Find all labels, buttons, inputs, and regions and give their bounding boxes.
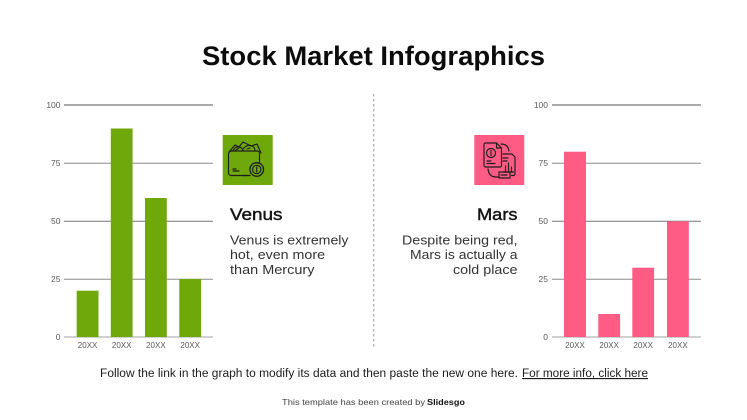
y axis labels: Mars chart: 0 [543, 332, 548, 342]
y axis labels: Venus chart: 100 [46, 100, 61, 110]
y axis labels: Mars chart: 75 [539, 158, 548, 168]
icon: wallet with cash and coin [223, 135, 273, 185]
description: Venus: than Mercury [230, 262, 315, 277]
y axis labels: Venus chart [46, 100, 61, 342]
description: Mars: Mars is actually a [410, 247, 518, 262]
text block: Venus [230, 205, 349, 277]
text block: Mars [402, 205, 518, 277]
bars: Mars values [564, 152, 689, 337]
bars: Venus values [77, 128, 201, 337]
description: Venus: Venus is extremely [230, 232, 349, 247]
description: Venus [230, 232, 349, 277]
heading: Venus: Venus [230, 205, 282, 224]
x axis labels: Venus chart: 20XX [78, 341, 98, 350]
title: Stock Market Infographics [202, 41, 545, 71]
icon: financial documents [474, 135, 524, 185]
y axis labels: Mars chart [534, 100, 548, 342]
credit line: Slidesgo [427, 397, 465, 407]
x axis labels: Venus chart [78, 341, 201, 350]
x axis labels: Venus chart: 20XX [112, 341, 132, 350]
x axis labels: Mars chart: 20XX [668, 341, 688, 350]
x axis labels: Venus chart: 20XX [180, 341, 201, 350]
heading: Mars: Mars [477, 205, 518, 224]
description: Mars: Despite being red, [402, 232, 518, 247]
description: Mars: cold place [453, 262, 518, 277]
y axis labels: Mars chart: 100 [534, 100, 548, 110]
description: Venus: hot, even more [230, 247, 325, 262]
x axis labels: Mars chart: 20XX [633, 341, 654, 350]
y axis labels: Venus chart: 50 [51, 216, 61, 226]
y axis labels: Mars chart: 25 [539, 274, 548, 284]
y axis labels: Mars chart: 50 [539, 216, 548, 226]
credit line: This template has been created by [282, 397, 426, 407]
x axis labels: Mars chart [565, 341, 688, 350]
caption with link: For more info, click here [522, 368, 648, 380]
caption with link: Follow the link in the graph to modify its data and then paste the new one here. [100, 368, 518, 380]
description: Mars [402, 232, 518, 277]
x axis labels: Venus chart: 20XX [146, 341, 166, 350]
bar chart: Venus [46, 100, 213, 350]
y axis labels: Venus chart: 25 [51, 274, 61, 284]
x axis labels: Mars chart: 20XX [599, 341, 620, 350]
bar chart: Mars [534, 100, 701, 350]
divider [373, 94, 375, 347]
y axis labels: Venus chart: 0 [56, 332, 61, 342]
x axis labels: Mars chart: 20XX [565, 341, 585, 350]
y axis labels: Venus chart: 75 [51, 158, 61, 168]
